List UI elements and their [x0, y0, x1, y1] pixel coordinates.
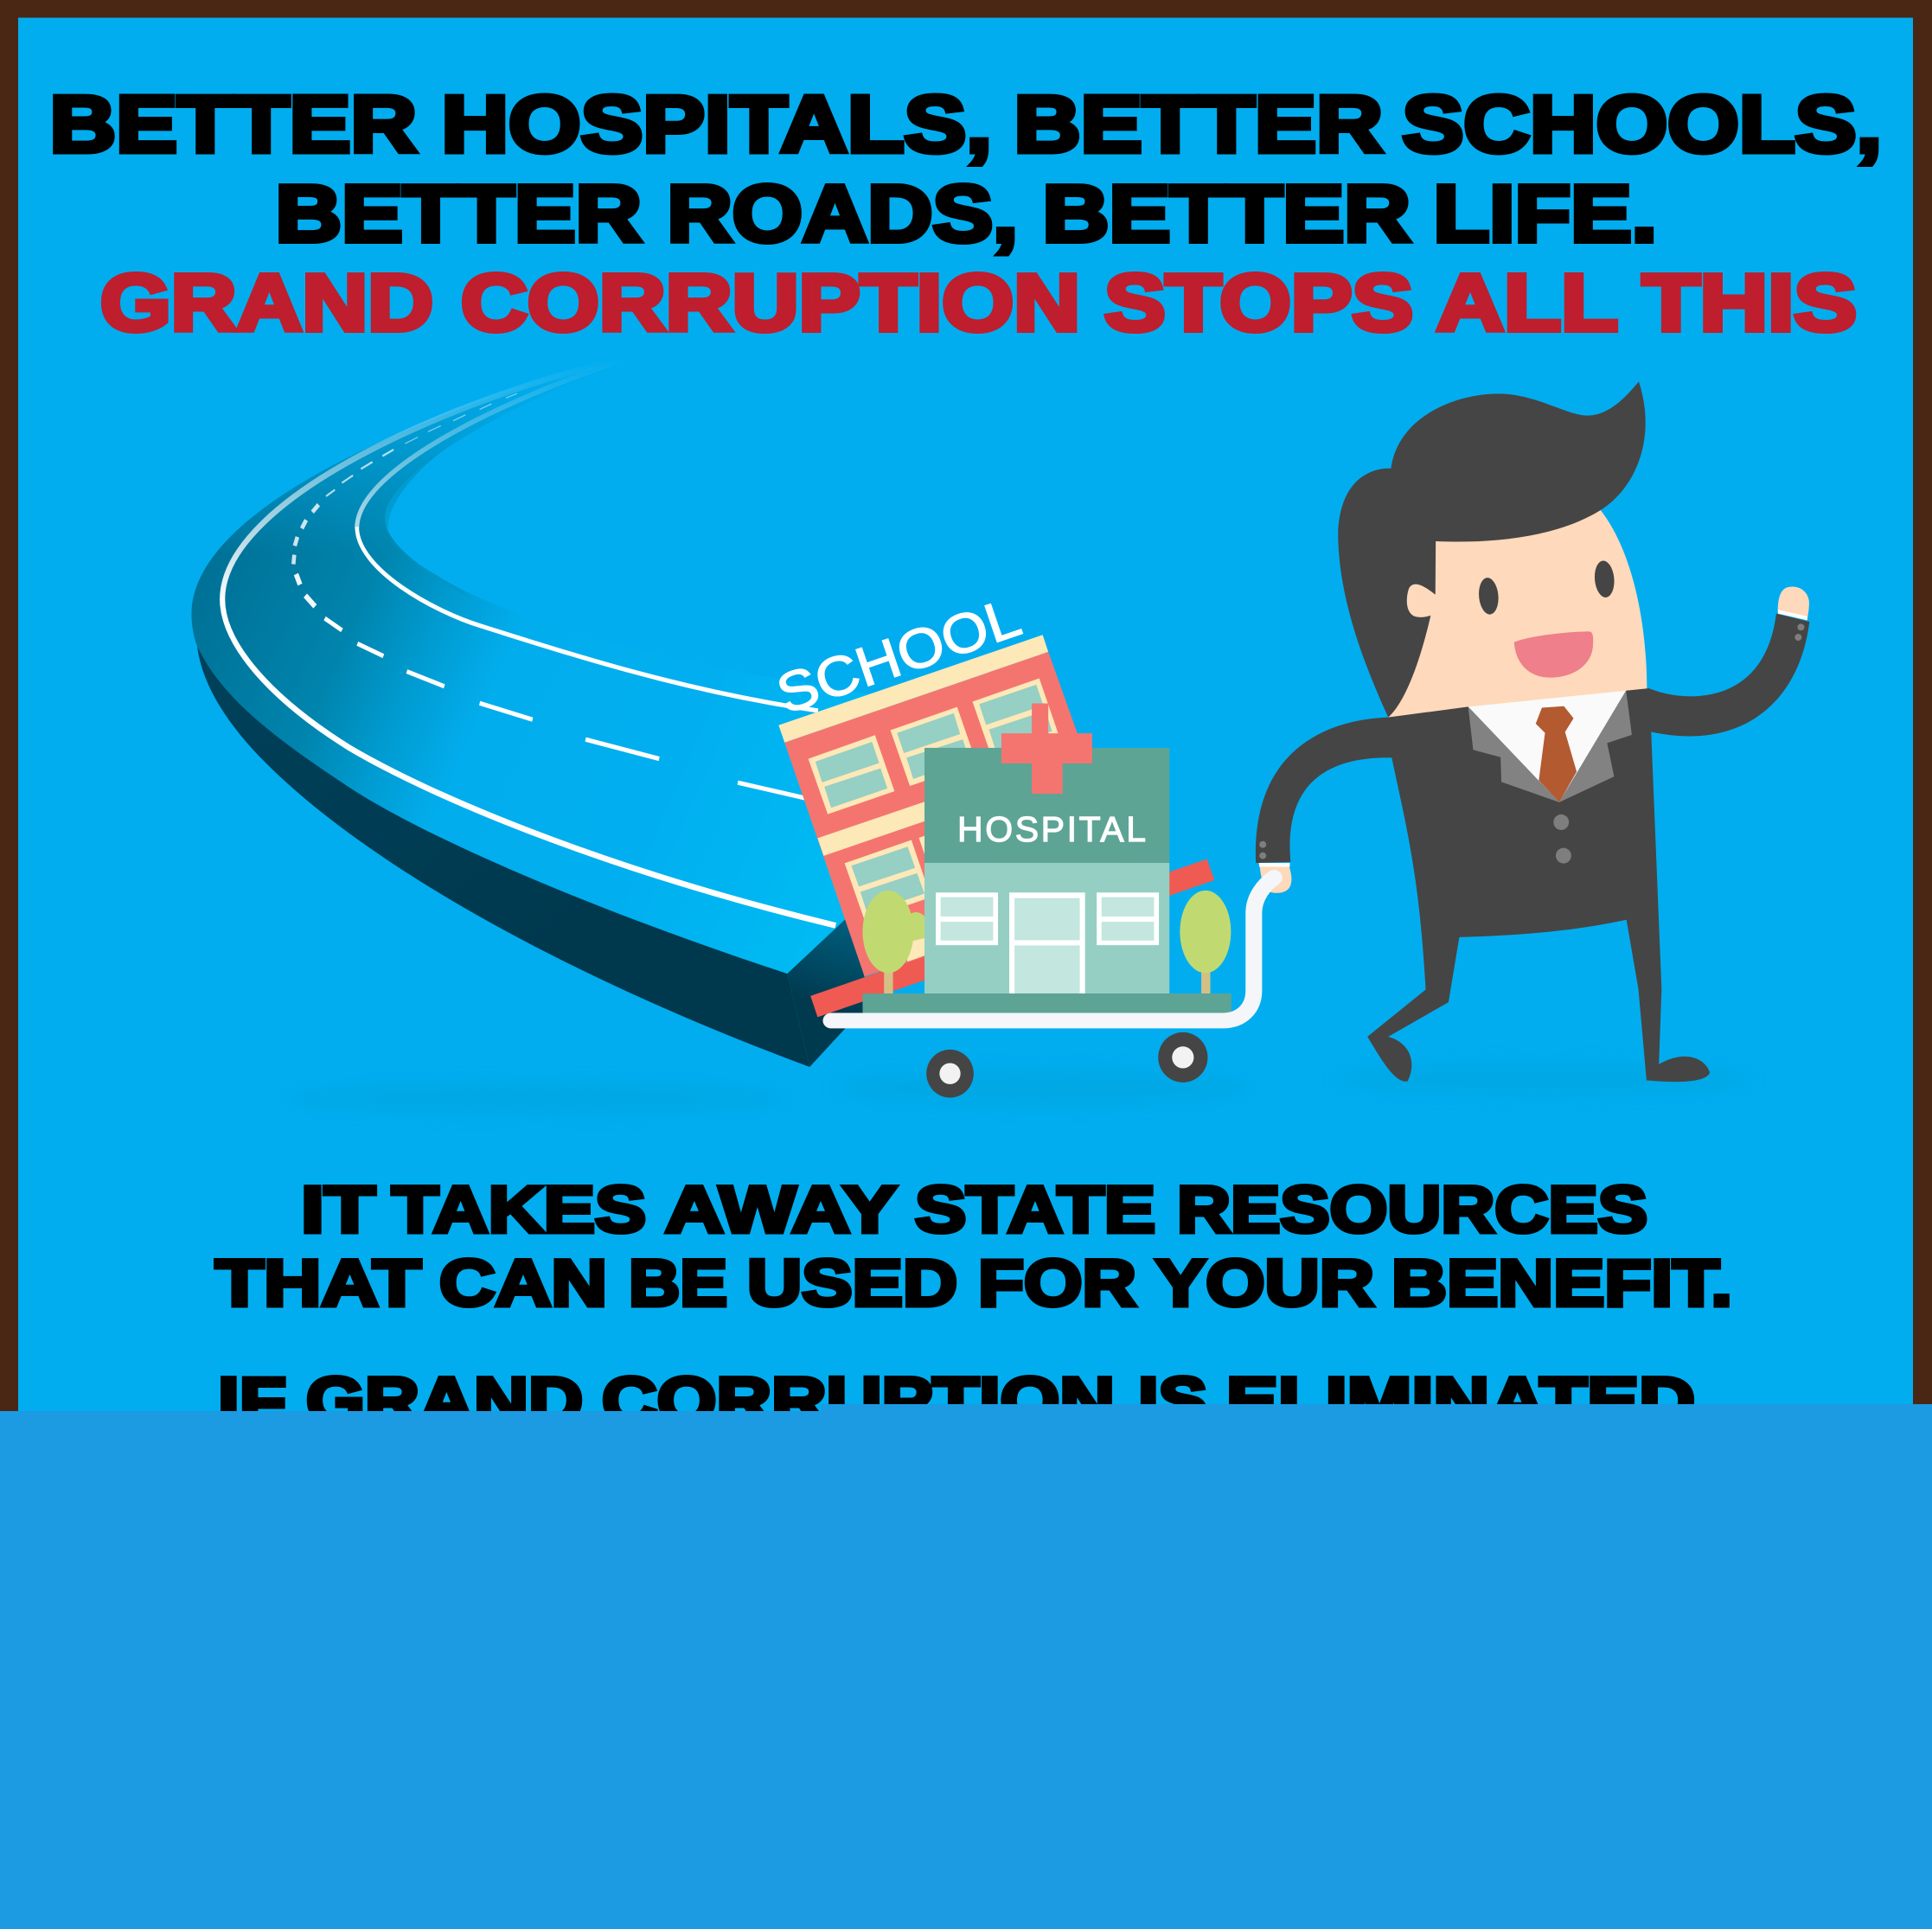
body line 2: BE — [629, 1247, 727, 1320]
suit body, legs and arms — [1256, 614, 1809, 1082]
jacket buttons — [1259, 623, 1804, 864]
title — [50, 79, 1882, 348]
body line 2: FOR — [978, 1247, 1136, 1320]
lapels — [1468, 691, 1632, 802]
title line 1: SCHOOLS, — [1403, 79, 1882, 169]
body line 2: THAT — [215, 1247, 421, 1320]
body line 2: YOUR — [1155, 1247, 1374, 1320]
road side wall — [197, 646, 809, 1067]
road illustration — [191, 355, 888, 1067]
face — [1388, 508, 1647, 718]
title line 1 — [50, 79, 1882, 169]
right hand — [1778, 587, 1809, 620]
title line 3 in red: ALL — [1436, 258, 1618, 348]
title line 1: HOSPITALS, — [441, 79, 992, 169]
title line 2: BETTER — [1043, 169, 1411, 259]
inner white lane line far part — [357, 355, 637, 528]
body line 1: IT — [301, 1173, 375, 1247]
title line 1: BETTER — [1014, 79, 1383, 169]
body line 2: USED — [747, 1247, 957, 1320]
road surface fade at far end — [191, 355, 888, 974]
body line 2: CAN — [439, 1247, 607, 1320]
body line 3, partly covered: IF — [218, 1364, 286, 1438]
cart with school and hospital — [778, 635, 1274, 1097]
title line 3 in red: GRAND — [100, 258, 433, 348]
brown frame — [0, 0, 1932, 1418]
shirt — [1468, 691, 1626, 802]
body line 1: TAKES — [392, 1173, 646, 1247]
covering blue panel — [0, 1404, 1932, 1929]
title line 3 in red: THIS — [1642, 258, 1857, 348]
title line 3 in red: STOPS — [1104, 258, 1413, 348]
body line 2: BENEFIT. — [1391, 1247, 1732, 1320]
body line 2 — [215, 1247, 1732, 1320]
trees — [862, 891, 1231, 993]
body line 1 — [301, 1173, 1647, 1247]
left hand — [1260, 865, 1291, 893]
road end cut — [787, 917, 864, 1067]
inner road wedge — [385, 448, 473, 599]
shirt cuffs — [1259, 610, 1807, 867]
body line 3, partly covered: GRAND — [306, 1364, 583, 1438]
cart wheels — [926, 1032, 1207, 1097]
body text — [215, 1173, 1732, 1438]
outer white lane line far part — [222, 355, 637, 600]
body line 3, partly covered: IS — [1138, 1364, 1207, 1438]
hair — [1338, 381, 1646, 718]
cart handle — [831, 878, 1274, 1020]
title line 1: BETTER — [50, 79, 417, 169]
title line 3 in red: CORRUPTION — [461, 258, 1080, 348]
title line 2: ROADS, — [668, 169, 1018, 259]
body line 3, partly covered: CORRUPTION — [602, 1364, 1115, 1438]
body line 1: STATE — [915, 1173, 1155, 1247]
title line 2: LIFE. — [1434, 169, 1657, 259]
body line 3, partly covered: ELIMINATED — [1226, 1364, 1695, 1438]
outer white lane line near part — [222, 599, 835, 925]
body line 3, partly covered — [218, 1364, 1695, 1438]
businessman — [1256, 381, 1809, 1082]
school label: SCHOOL — [769, 585, 1028, 725]
ear — [1407, 584, 1436, 617]
eyes — [1477, 559, 1616, 616]
road surface — [191, 355, 888, 974]
tie — [1536, 706, 1577, 802]
body line 1: AWAY — [665, 1173, 897, 1247]
title line 2 — [275, 169, 1657, 259]
mouth — [1514, 631, 1593, 678]
centre dashes — [293, 393, 805, 798]
ground shadows — [285, 1064, 1751, 1114]
title line 2: BETTER — [275, 169, 642, 259]
body line 1: RESOURCES — [1177, 1173, 1647, 1247]
inner white lane line near part — [357, 527, 818, 711]
title line 3 in red — [100, 258, 1857, 348]
hospital building — [862, 703, 1231, 1012]
school building — [778, 635, 1214, 1017]
hospital label: HOSPITAL — [957, 809, 1146, 849]
